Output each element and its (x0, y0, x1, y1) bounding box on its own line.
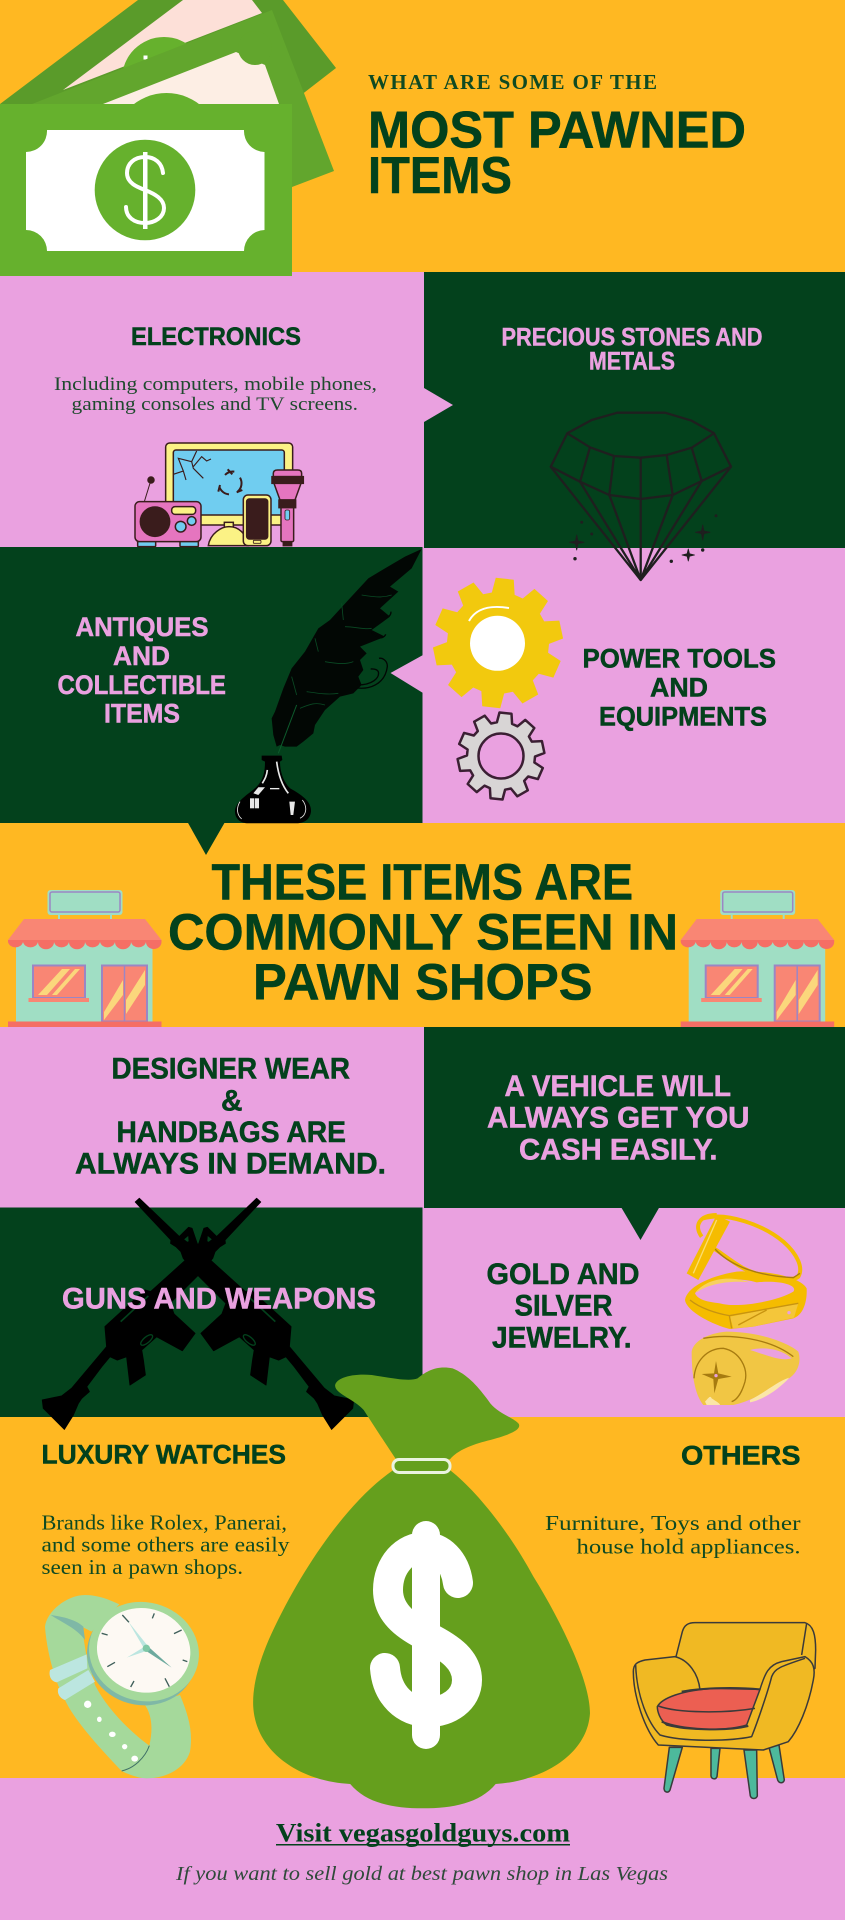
text: others (545, 1440, 801, 1558)
text: vehicle: CASH EASILY. (519, 1134, 718, 1166)
bag body (253, 1470, 590, 1808)
heading: common items: COMMONLY SEEN IN (168, 904, 678, 960)
arrow: vehicle to jewelry (621, 1207, 660, 1240)
text: jewelry: SILVER (514, 1290, 612, 1322)
text: luxury watches (42, 1440, 290, 1579)
panel: guns (0, 1208, 422, 1418)
rifle with stock lower right (135, 1198, 354, 1429)
text: antiques (58, 612, 226, 728)
open ring (687, 1215, 800, 1280)
footer tagline: If you want to sell gold at best pawn shop in Las Vegas (175, 1863, 668, 1885)
text: designer wear: HANDBAGS ARE (116, 1116, 346, 1149)
monitor (166, 443, 293, 546)
icon: pawn shop left (8, 890, 162, 1027)
panel: electronics (0, 272, 424, 548)
text: designer wear (75, 1052, 386, 1180)
phone (243, 495, 271, 546)
panel: header background (0, 0, 845, 273)
text: luxury watches: seen in a pawn shops. (42, 1555, 243, 1579)
text: others: house hold appliances. (576, 1534, 800, 1558)
text: jewelry: JEWELRY. (492, 1322, 632, 1354)
tie ring (393, 1460, 450, 1472)
icon: diamond (551, 413, 731, 580)
rifle with stock lower left (42, 1198, 261, 1429)
panel: vehicle (424, 1027, 845, 1208)
icon: yellow gear (433, 578, 563, 708)
text: others: OTHERS (681, 1440, 800, 1470)
title: ITEMS (368, 147, 512, 205)
panel: footer (0, 1778, 845, 1920)
icon: banknotes (0, 0, 336, 276)
panel: precious stones (424, 272, 845, 548)
icon: gold rings (685, 1215, 807, 1405)
text: electronics: Including computers, mobile phones, (54, 374, 377, 395)
panel: designer wear (0, 1027, 424, 1208)
text: others: Furniture, Toys and other (545, 1511, 801, 1535)
text: vehicle: A VEHICLE WILL (504, 1070, 731, 1103)
text: electronics: gaming consoles and TV screens. (72, 394, 358, 415)
panel: jewelry (422, 1208, 845, 1418)
seat body (633, 1657, 814, 1750)
band ring (685, 1271, 807, 1329)
text: electronics (54, 323, 377, 415)
arrow: tools to antiques (390, 655, 423, 693)
text: jewelry: GOLD AND (486, 1258, 640, 1291)
text: antiques: ITEMS (104, 698, 180, 728)
radio (135, 477, 201, 547)
back (676, 1623, 816, 1710)
keepers (50, 1654, 95, 1700)
text: designer wear: & (221, 1084, 242, 1118)
icon: crossed rifles (42, 1198, 354, 1429)
text: vehicle (487, 1070, 750, 1166)
text: electronics: ELECTRONICS (131, 323, 301, 351)
title: MOST PAWNED (368, 102, 746, 160)
text: power tools: POWER TOOLS (582, 644, 776, 674)
signet ring (692, 1332, 800, 1405)
feather (272, 549, 422, 753)
text: luxury watches: Brands like Rolex, Panerai, (42, 1510, 287, 1534)
icon: electronics group (135, 443, 303, 547)
strap (45, 1595, 191, 1778)
watch case (76, 1590, 210, 1718)
text: luxury watches: and some others are easily (42, 1532, 290, 1556)
text: power tools (582, 644, 776, 732)
text: antiques: AND (113, 641, 170, 671)
title (368, 70, 746, 205)
heading: common items: THESE ITEMS ARE (212, 854, 633, 910)
flashlight (272, 470, 303, 546)
icon: wristwatch (45, 1590, 210, 1778)
cushion (657, 1688, 760, 1729)
arrow: antiques to banner (188, 822, 225, 855)
text: jewelry (486, 1258, 640, 1354)
icon: pawn shop right (681, 890, 834, 1027)
heading: common items: PAWN SHOPS (253, 954, 592, 1010)
text: antiques: ANTIQUES (76, 612, 208, 642)
panel: power tools (422, 548, 845, 823)
legs (664, 1745, 784, 1798)
text: precious stones: PRECIOUS STONES AND (502, 324, 762, 352)
heading: common items (168, 854, 678, 1010)
icon: money bag (253, 1367, 590, 1808)
text: vehicle: ALWAYS GET YOU (487, 1102, 750, 1134)
arrow: electronics to stones (424, 388, 453, 422)
text: precious stones: METALS (589, 348, 675, 376)
text: antiques: COLLECTIBLE (58, 670, 226, 700)
text: designer wear: DESIGNER WEAR (112, 1052, 350, 1086)
text: power tools: AND (650, 672, 708, 702)
panel: common items banner (0, 823, 845, 1027)
panel: watches and others (0, 1417, 845, 1778)
panel: antiques (0, 547, 422, 823)
icon: grey gear (458, 712, 544, 800)
icon: armchair (633, 1623, 816, 1798)
ink bottle (235, 756, 311, 823)
footer link: Visit vegasgoldguys.com (276, 1818, 570, 1848)
title: WHAT ARE SOME OF THE (368, 70, 657, 94)
text: power tools: EQUIPMENTS (599, 702, 767, 732)
text: designer wear: ALWAYS IN DEMAND. (75, 1148, 386, 1180)
bag neck fabric (335, 1367, 519, 1459)
text: precious stones (502, 324, 762, 376)
text: guns: GUNS AND WEAPONS (62, 1282, 376, 1316)
text: luxury watches: LUXURY WATCHES (42, 1440, 286, 1470)
icon: feather quill and ink bottle (235, 549, 422, 823)
dollar sign (385, 1521, 467, 1749)
